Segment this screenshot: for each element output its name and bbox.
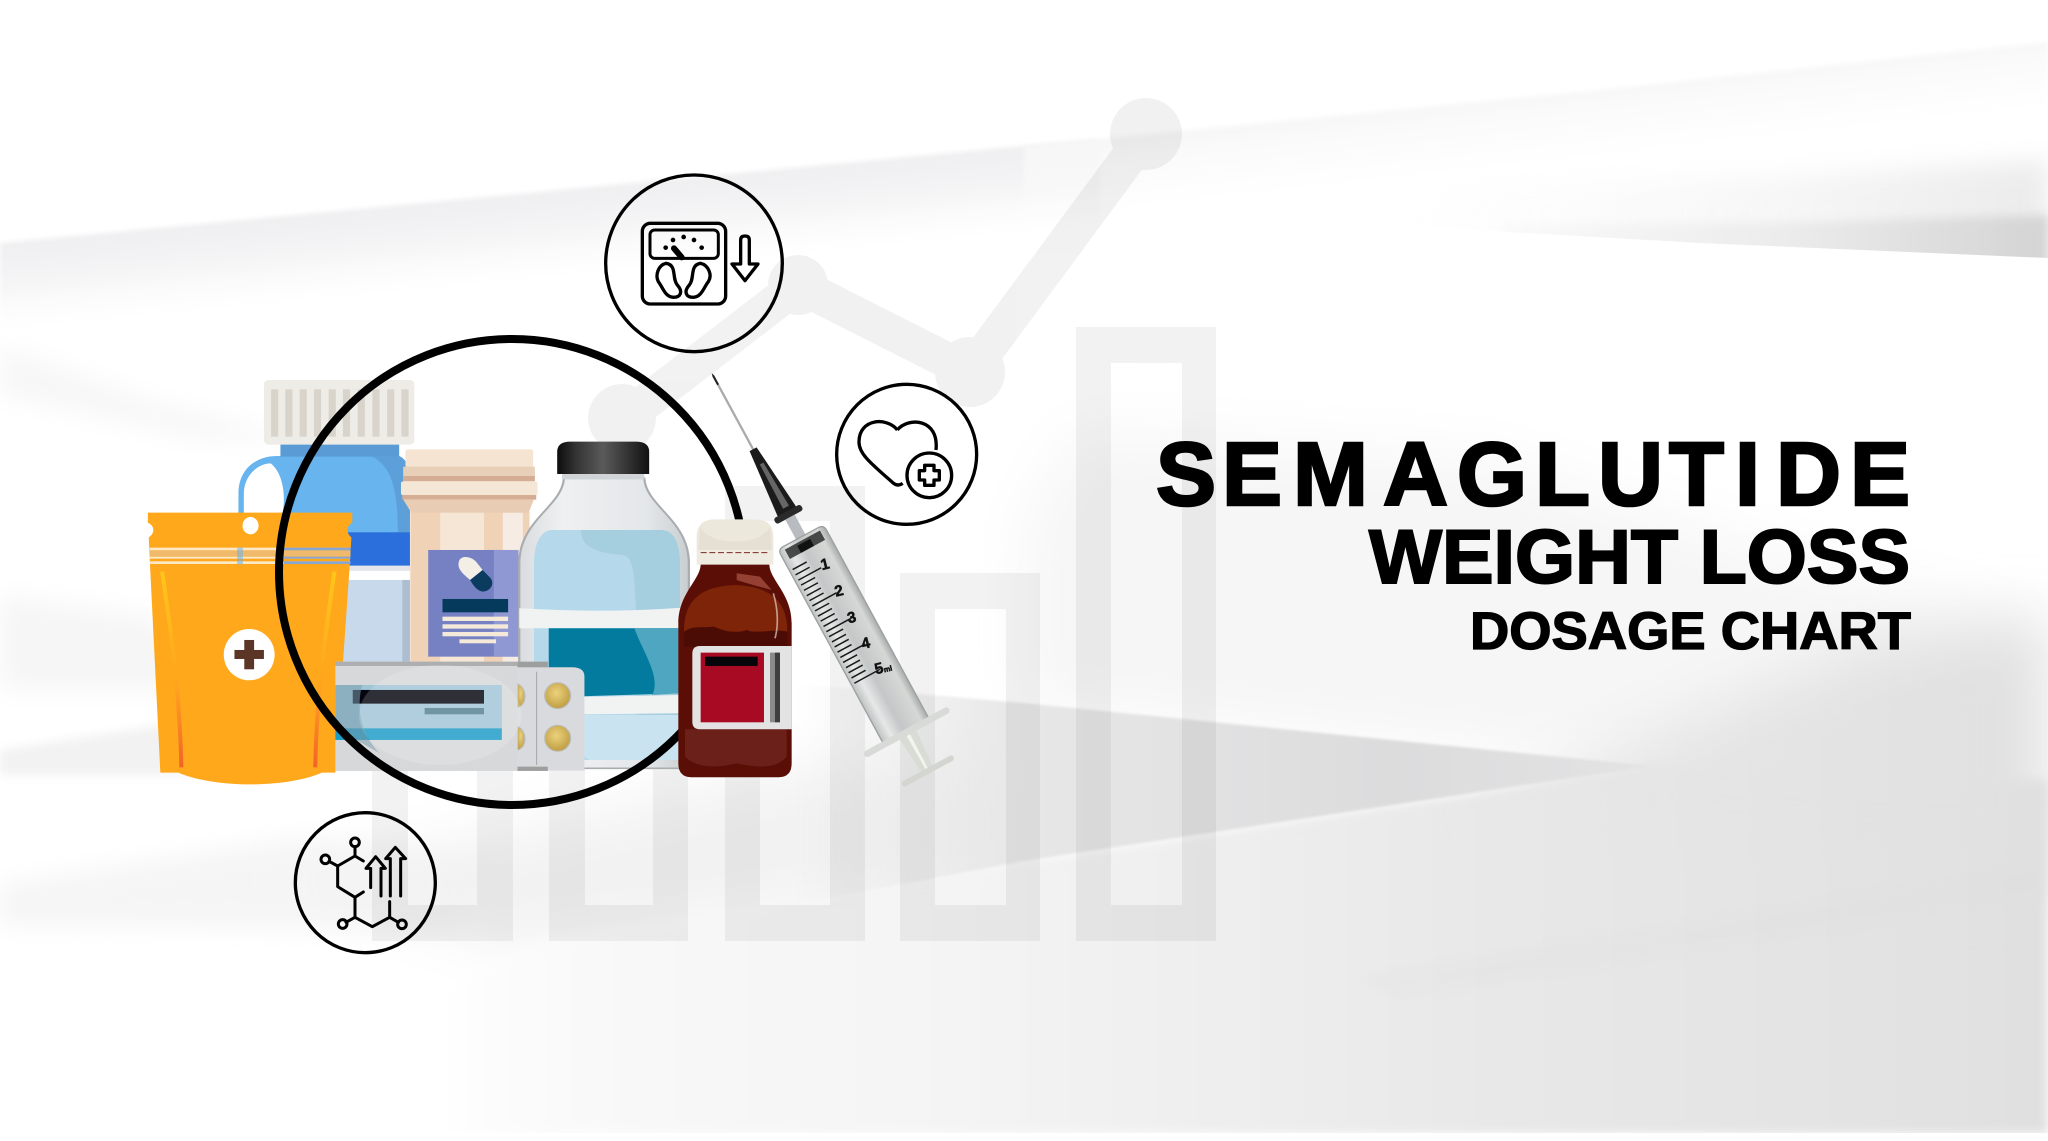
blue bottle bbox=[238, 380, 414, 662]
graduation ticks bbox=[793, 556, 880, 683]
background chart: hollow ascending bars bbox=[372, 327, 1216, 941]
subtitle: DOSAGE CHART: DOSAGE CHART bbox=[1470, 602, 1911, 661]
barrel bbox=[778, 525, 929, 744]
blister pills bbox=[517, 683, 571, 751]
icon: pouch medical cross bbox=[224, 629, 275, 680]
glass vial with blue liquid bbox=[519, 442, 689, 768]
syringe scale numbers: 4 bbox=[860, 634, 872, 653]
orange pouch bbox=[148, 513, 352, 784]
syringe scale numbers: 1 bbox=[819, 555, 832, 574]
bottle label bbox=[692, 646, 792, 729]
icon: heart with plus bbox=[837, 384, 977, 524]
plunger bbox=[880, 716, 955, 787]
bottle cap with ribs bbox=[264, 380, 414, 445]
amber medicine bottle bbox=[678, 519, 792, 777]
vial black cap bbox=[557, 442, 649, 474]
syringe scale numbers: 3 bbox=[846, 609, 858, 627]
icon: molecule with upward arrows bbox=[295, 813, 435, 953]
jar label with capsule bbox=[428, 550, 518, 657]
subtitle: WEIGHT LOSS: WEIGHT LOSS bbox=[1369, 515, 1910, 600]
icon: bathroom scale with down arrow bbox=[606, 175, 782, 352]
title: SEMAGLUTIDE: SEMAGLUTIDE bbox=[1156, 425, 1910, 525]
large black ring bbox=[279, 339, 745, 805]
syringe bbox=[669, 350, 972, 797]
bottle cap bbox=[697, 519, 773, 565]
tan pill jar bbox=[401, 449, 538, 662]
syringe scale numbers bbox=[819, 555, 894, 678]
background chart: rising trend line bbox=[588, 98, 1182, 452]
syringe scale numbers: 5ml bbox=[873, 658, 894, 678]
syringe scale numbers: 2 bbox=[833, 582, 845, 601]
blister pack and carton bbox=[335, 662, 584, 771]
